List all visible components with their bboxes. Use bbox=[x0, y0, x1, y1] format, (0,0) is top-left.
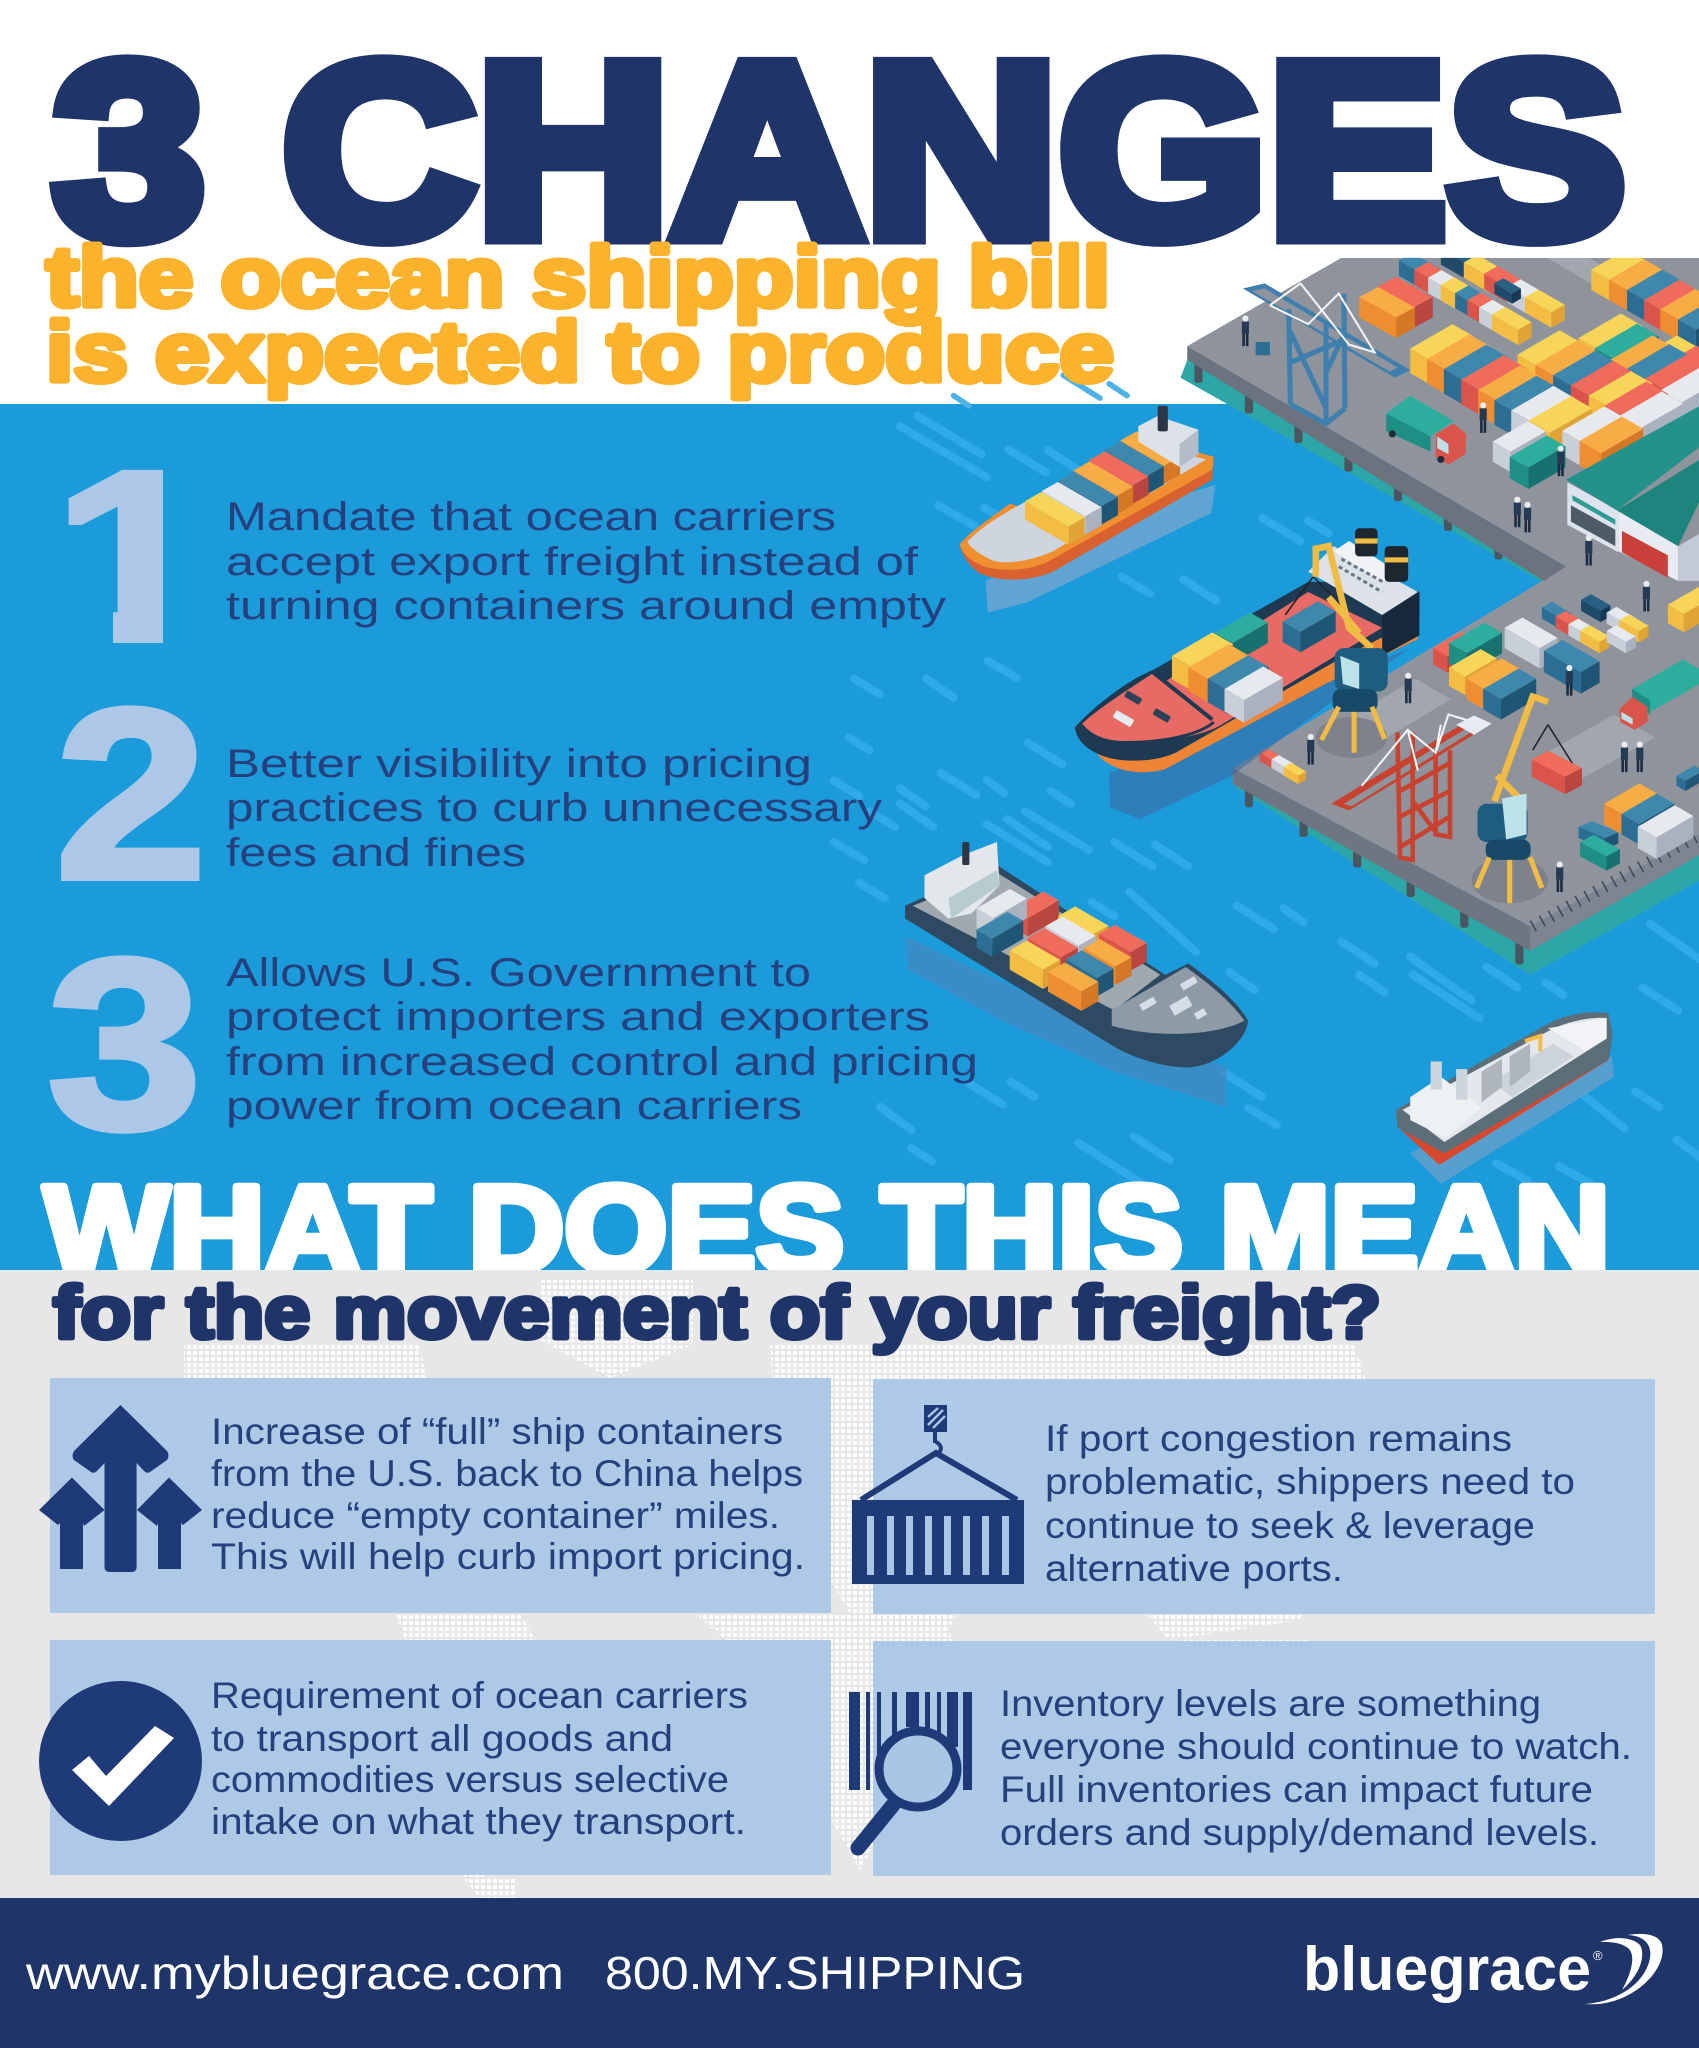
item 3 text bbox=[226, 951, 978, 1128]
box 4 text: everyone should continue to watch. bbox=[1000, 1726, 1632, 1767]
dashes above the water line bbox=[954, 375, 1127, 406]
website: www.mybluegrace.com bbox=[25, 1947, 564, 1999]
panel: box 3 bbox=[39, 1640, 831, 1875]
box 3 text bbox=[211, 1675, 748, 1842]
workers lower pier bbox=[1307, 665, 1643, 892]
panel: box 1 bbox=[39, 1378, 831, 1613]
ship 3: grey bow cargo ship bbox=[905, 842, 1248, 1107]
truck: red cab bbox=[1619, 659, 1699, 730]
item 2 text: Better visibility into pricing bbox=[226, 742, 812, 786]
upper checker container stack bbox=[1399, 258, 1565, 346]
panel: box 4 bbox=[849, 1641, 1655, 1876]
water ripples bbox=[834, 416, 1699, 1183]
pier: roads bbox=[1356, 258, 1654, 778]
box 2 text: continue to seek & leverage bbox=[1045, 1505, 1535, 1546]
box 1 text: from the U.S. back to China helps bbox=[211, 1453, 803, 1494]
upper right container row bbox=[1591, 258, 1699, 347]
container yard bbox=[1410, 313, 1699, 489]
box 3 text: Requirement of ocean carriers bbox=[211, 1675, 748, 1716]
pier: lower right side wall bbox=[1530, 834, 1699, 951]
item 1 text bbox=[226, 495, 946, 628]
box 1 text bbox=[211, 1411, 805, 1577]
box 4 text bbox=[1000, 1683, 1632, 1853]
title word: CHANGES bbox=[282, 11, 1626, 289]
pier: deck surface bbox=[1187, 258, 1699, 926]
item 1 text: accept export freight instead of bbox=[226, 540, 919, 584]
icon: barcode with magnifier bbox=[849, 1692, 972, 1848]
pier: lower left side wall bbox=[1233, 768, 1530, 951]
item 2 text: practices to curb unnecessary bbox=[226, 786, 882, 830]
panel: box 2 bbox=[852, 1379, 1655, 1614]
box 3 text: commodities versus selective bbox=[211, 1759, 729, 1800]
logo: bluegrace: bluegrace bbox=[1303, 1935, 1591, 2004]
heading: movement of freight: for the movement of your freight? bbox=[53, 1271, 1381, 1354]
box 3 text: to transport all goods and bbox=[211, 1718, 673, 1759]
panel: ocean background bbox=[0, 404, 1699, 1270]
pier pilings bbox=[1194, 362, 1523, 964]
ship 2: large red cargo ship bbox=[1075, 528, 1419, 819]
icon: check mark circle bbox=[39, 1681, 202, 1841]
yellow crane with red container bbox=[1471, 697, 1582, 903]
box 2 text: If port congestion remains bbox=[1045, 1418, 1512, 1459]
item 3 text: power from ocean carriers bbox=[226, 1084, 802, 1128]
icon: container on crane hook bbox=[852, 1405, 1024, 1584]
workers upper pier bbox=[1242, 316, 1650, 611]
box 4 text: Full inventories can impact future bbox=[1000, 1769, 1593, 1810]
box 3 text: intake on what they transport. bbox=[211, 1801, 746, 1842]
item 3 text: protect importers and exporters bbox=[226, 995, 930, 1039]
item 2 text bbox=[226, 742, 882, 875]
item 3 text: from increased control and pricing bbox=[226, 1040, 978, 1084]
box 4 text: orders and supply/demand levels. bbox=[1000, 1812, 1599, 1853]
item 1 text: turning containers around empty bbox=[226, 584, 946, 628]
item 3 text: Allows U.S. Government to bbox=[226, 951, 811, 995]
yellow crane loading ship bbox=[1316, 546, 1388, 758]
illustration: isometric port with ships bbox=[834, 242, 1699, 1184]
item 2 text: fees and fines bbox=[226, 831, 526, 875]
subtitle bbox=[46, 230, 1114, 399]
red gantry crane bbox=[1331, 714, 1492, 860]
subtitle line 1: the ocean shipping bill bbox=[46, 230, 1110, 324]
box 1 text: This will help curb import pricing. bbox=[211, 1536, 805, 1577]
ship 1: orange cargo ship bbox=[960, 406, 1215, 612]
box 1 text: Increase of “full” ship containers bbox=[211, 1411, 783, 1452]
box 2 text: alternative ports. bbox=[1045, 1548, 1343, 1589]
pier: fence bbox=[1533, 834, 1699, 926]
blue crane bbox=[1243, 283, 1410, 424]
footer bbox=[0, 1898, 1699, 2048]
orange and red containers bbox=[1359, 277, 1433, 338]
title numeral: 3 bbox=[53, 11, 205, 289]
box 2 text: problematic, shippers need to bbox=[1045, 1461, 1575, 1502]
truck: green bbox=[1386, 396, 1466, 464]
title bbox=[53, 11, 1626, 289]
warehouse bbox=[1566, 406, 1699, 581]
heading: what does this mean: WHAT DOES THIS MEAN bbox=[44, 1161, 1610, 1299]
pier: lower water shadow bbox=[1233, 781, 1699, 975]
subtitle line 2: is expected to produce bbox=[46, 305, 1114, 399]
numeral 3: 3 bbox=[47, 909, 202, 1180]
logo: bluegrace: ® bbox=[1593, 1948, 1603, 1963]
box 2 text bbox=[1045, 1418, 1575, 1589]
numeral 2: 2 bbox=[55, 659, 207, 930]
pier: water shadow bbox=[1181, 360, 1566, 583]
box 4 text: Inventory levels are something bbox=[1000, 1683, 1541, 1724]
icon: three up arrows bbox=[39, 1405, 202, 1572]
lower yard containers bbox=[1260, 586, 1699, 871]
phone: 800.MY.SHIPPING bbox=[605, 1947, 1025, 1999]
panel: grey section background bbox=[0, 1270, 1699, 1898]
pier: upper side wall bbox=[1187, 346, 1566, 581]
numeral 1: 1 bbox=[52, 421, 217, 692]
ship 4: white and red tanker bbox=[1396, 1012, 1614, 1184]
dotted world map bbox=[184, 1280, 1400, 1898]
item 1 text: Mandate that ocean carriers bbox=[226, 495, 836, 539]
box 1 text: reduce “empty container” miles. bbox=[211, 1495, 780, 1536]
